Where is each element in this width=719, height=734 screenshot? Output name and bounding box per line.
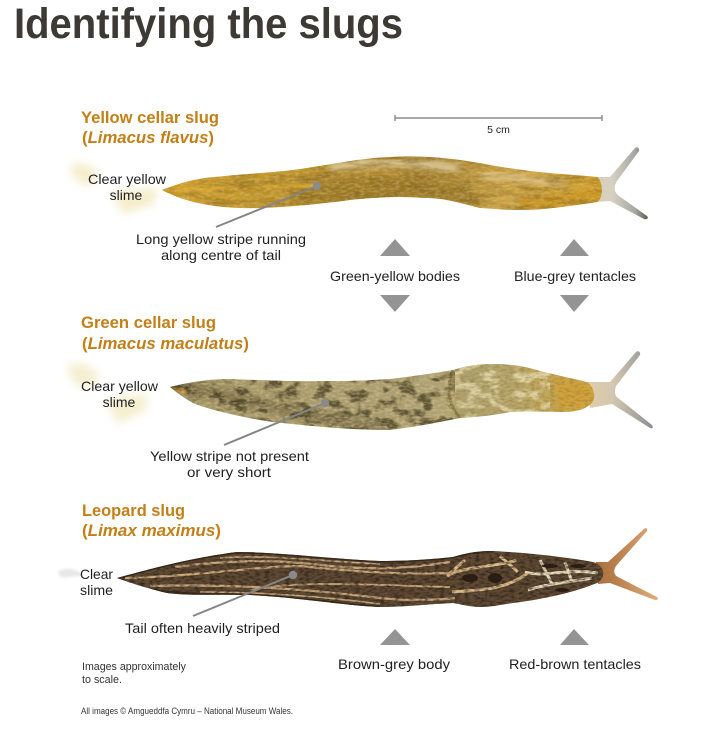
- slime label: Clear yellow: [88, 171, 167, 187]
- annotation: stripe absent: Yellow stripe not present: [150, 448, 309, 464]
- label: tentacles: Blue-grey tentacles: [514, 268, 636, 284]
- slug body: [170, 364, 594, 430]
- image credit: All images © Amgueddfa Cymru – National Museum Wales.: [81, 706, 293, 716]
- tentacles: [596, 528, 658, 600]
- annotation: stripe absent: or very short: [187, 464, 271, 480]
- arrow: up, bodies: [380, 239, 410, 256]
- slime smear: [68, 363, 148, 424]
- panel: leopard slug: [58, 501, 658, 672]
- label: tentacles: Red-brown tentacles: [509, 656, 641, 672]
- scale note: Images approximately: [82, 661, 186, 673]
- title: Identifying the slugs: [14, 0, 403, 48]
- label: bodies: Green-yellow bodies: [330, 268, 460, 284]
- slime label: slime: [110, 187, 143, 203]
- scale bar: 5 cm: 5 cm: [487, 124, 510, 136]
- slug body: [117, 551, 604, 607]
- arrow: up, body: [380, 629, 410, 645]
- heading: yellow cellar slug: [81, 108, 219, 147]
- annotation: yellow stripe: along centre of tail: [161, 247, 281, 263]
- heading: yellow cellar slug: Yellow cellar slug: [81, 108, 219, 127]
- arrow: down, bodies: [380, 295, 410, 312]
- slime label: [88, 171, 167, 203]
- arrow: up, tentacles: [560, 239, 589, 256]
- slime label: slime: [103, 394, 136, 410]
- panel: yellow cellar slug: [70, 108, 648, 263]
- annotation: striped tail: Tail often heavily striped: [125, 620, 280, 636]
- annotation: yellow stripe: [136, 231, 306, 263]
- slime label: [80, 566, 113, 598]
- annotation: stripe absent: [150, 448, 309, 480]
- panel: shared features of cellar slugs: [330, 239, 636, 312]
- annotation: yellow stripe: Long yellow stripe running: [136, 231, 306, 247]
- label: body: Brown-grey body: [338, 656, 450, 672]
- heading: leopard slug: [82, 501, 221, 540]
- scale bar: 5 cm: [395, 115, 602, 136]
- slime label: Clear: [80, 566, 113, 582]
- heading: yellow cellar slug: (Limacus flavus): [82, 128, 214, 147]
- pointer line: [193, 571, 297, 616]
- scale note: [82, 661, 186, 686]
- slime smear: [58, 569, 84, 577]
- heading: green cellar slug: [81, 313, 249, 353]
- arrow: down, tentacles: [560, 295, 589, 312]
- slime label: [81, 378, 159, 410]
- slime label: slime: [80, 582, 113, 598]
- scale note: to scale.: [82, 674, 122, 686]
- heading: green cellar slug: (Limacus maculatus): [82, 334, 249, 353]
- pointer line: [216, 182, 321, 227]
- pointer line: [224, 399, 329, 445]
- heading: leopard slug: (Limax maximus): [82, 521, 221, 540]
- heading: leopard slug: Leopard slug: [82, 501, 185, 520]
- tentacles: [597, 147, 648, 219]
- arrow: up, tentacles: [560, 629, 589, 645]
- slug body: [162, 156, 602, 210]
- tentacles: [586, 351, 653, 428]
- slime smear: [70, 163, 158, 214]
- slime label: Clear yellow: [81, 378, 159, 394]
- heading: green cellar slug: Green cellar slug: [81, 313, 216, 332]
- panel: green cellar slug: [68, 313, 653, 480]
